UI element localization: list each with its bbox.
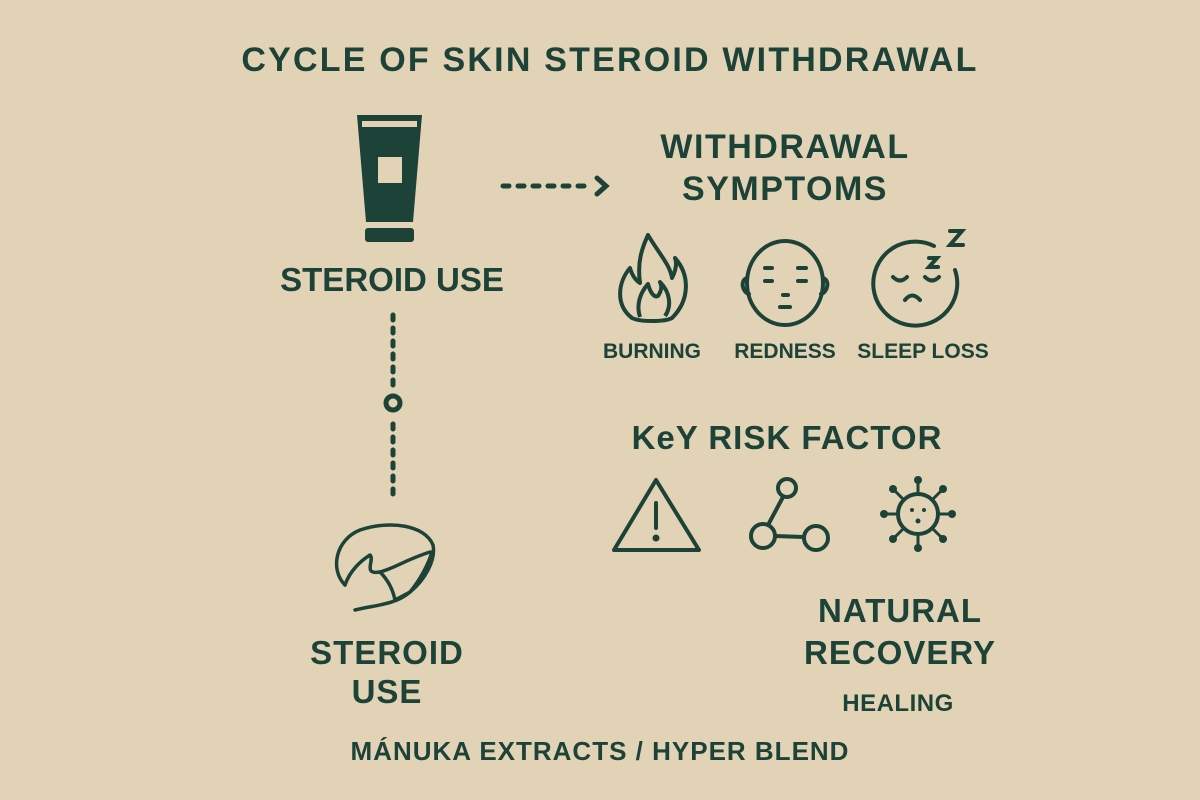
heading: natural recovery: NATURAL [818,592,982,629]
labels: symptoms: REDNESS [734,340,836,363]
heading: withdrawal symptoms: WITHDRAWAL [660,128,910,166]
text: healing: HEALING [842,690,954,717]
connector: dotted vertical [386,315,400,494]
icon: virus [880,476,956,552]
labels: symptoms [603,340,989,363]
heading: natural recovery: RECOVERY [804,634,996,671]
labels: symptoms: SLEEP LOSS [857,340,989,363]
arrow: dotted right [503,178,606,194]
heading: key risk factor: KeY RISK FACTOR [632,419,942,456]
icon: sleepy face [873,231,963,326]
icon: flame [620,235,686,321]
heading: natural recovery [804,592,996,671]
heading: steroid use (bottom) [310,634,464,710]
icon: warning triangle [614,480,699,550]
title: CYCLE OF SKIN STEROID WITHDRAWAL [241,41,979,79]
heading: steroid use: STEROID USE [280,261,504,298]
icon: network [751,479,828,550]
heading: withdrawal symptoms [660,128,910,208]
labels: symptoms: BURNING [603,340,701,363]
heading: steroid use (bottom): USE [352,673,422,710]
footer text: MÁNUKA EXTRACTS / HYPER BLEND [351,736,849,766]
icon: hand [337,525,433,610]
heading: steroid use (bottom): STEROID [310,634,464,671]
icon: face [743,241,827,325]
heading: withdrawal symptoms: SYMPTOMS [682,170,888,208]
icon: steroid tube [357,115,422,242]
